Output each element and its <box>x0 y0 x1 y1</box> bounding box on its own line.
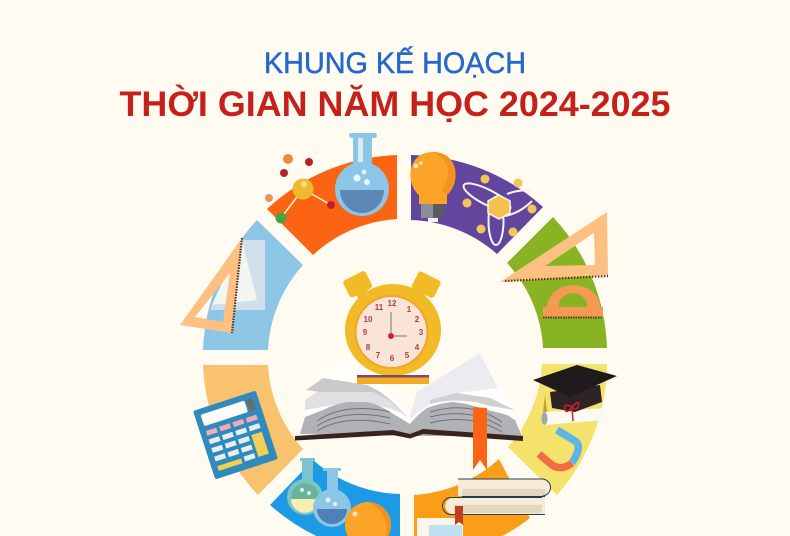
center illustration: alarm clock: 7 <box>376 351 381 360</box>
icon: green flask <box>287 458 323 515</box>
center illustration: alarm clock <box>342 270 442 384</box>
ring segment: orange chemistry <box>265 133 397 255</box>
title: THỜI GIAN NĂM HỌC 2024-2025 <box>120 84 670 124</box>
icon: graduation cap <box>533 365 617 421</box>
icon: magnet <box>539 430 578 468</box>
ring segment: purple physics <box>410 152 543 254</box>
center illustration: alarm clock: 8 <box>366 343 371 352</box>
ring segment: orange books <box>414 459 550 536</box>
icon: paper with picture <box>417 518 463 536</box>
icon: set square <box>180 238 242 333</box>
center illustration: alarm clock: 4 <box>415 343 420 352</box>
ring segment: green maths <box>500 212 608 348</box>
icon: blue flask <box>313 468 351 527</box>
center illustration: alarm clock: 1 <box>407 305 412 314</box>
icon: atom <box>460 174 536 245</box>
center illustration: alarm clock: 3 <box>419 328 424 337</box>
center illustration: open book <box>295 352 523 470</box>
center illustration: alarm clock: 10 <box>364 315 373 324</box>
center illustration: alarm clock: 12 <box>388 299 397 308</box>
ring segment: light blue geometry <box>180 220 303 350</box>
title <box>120 46 670 124</box>
center illustration: alarm clock: 9 <box>363 328 368 337</box>
icon: large set square <box>500 212 608 282</box>
title: KHUNG KẾ HOẠCH <box>264 46 526 80</box>
center illustration: alarm clock: 5 <box>405 351 410 360</box>
icon: flask <box>335 133 389 216</box>
icon: stacked books <box>442 479 550 525</box>
center illustration: alarm clock: 11 <box>375 303 384 312</box>
ring segment: peach calculator <box>193 365 303 495</box>
icon: protractor <box>543 285 603 318</box>
icon: molecule <box>265 154 335 224</box>
center illustration: alarm clock: 6 <box>390 354 395 363</box>
ring segment: yellow science <box>508 364 617 495</box>
icon: light bulb <box>410 152 456 222</box>
icon: calculator <box>193 391 278 479</box>
center illustration: alarm clock: 2 <box>415 315 420 324</box>
icon: bookmark <box>473 407 487 470</box>
icon: diploma scroll <box>542 408 606 425</box>
ring segment: blue lab <box>270 458 400 536</box>
icon: orange ball <box>345 502 391 536</box>
icon: paper sheets <box>210 240 265 310</box>
